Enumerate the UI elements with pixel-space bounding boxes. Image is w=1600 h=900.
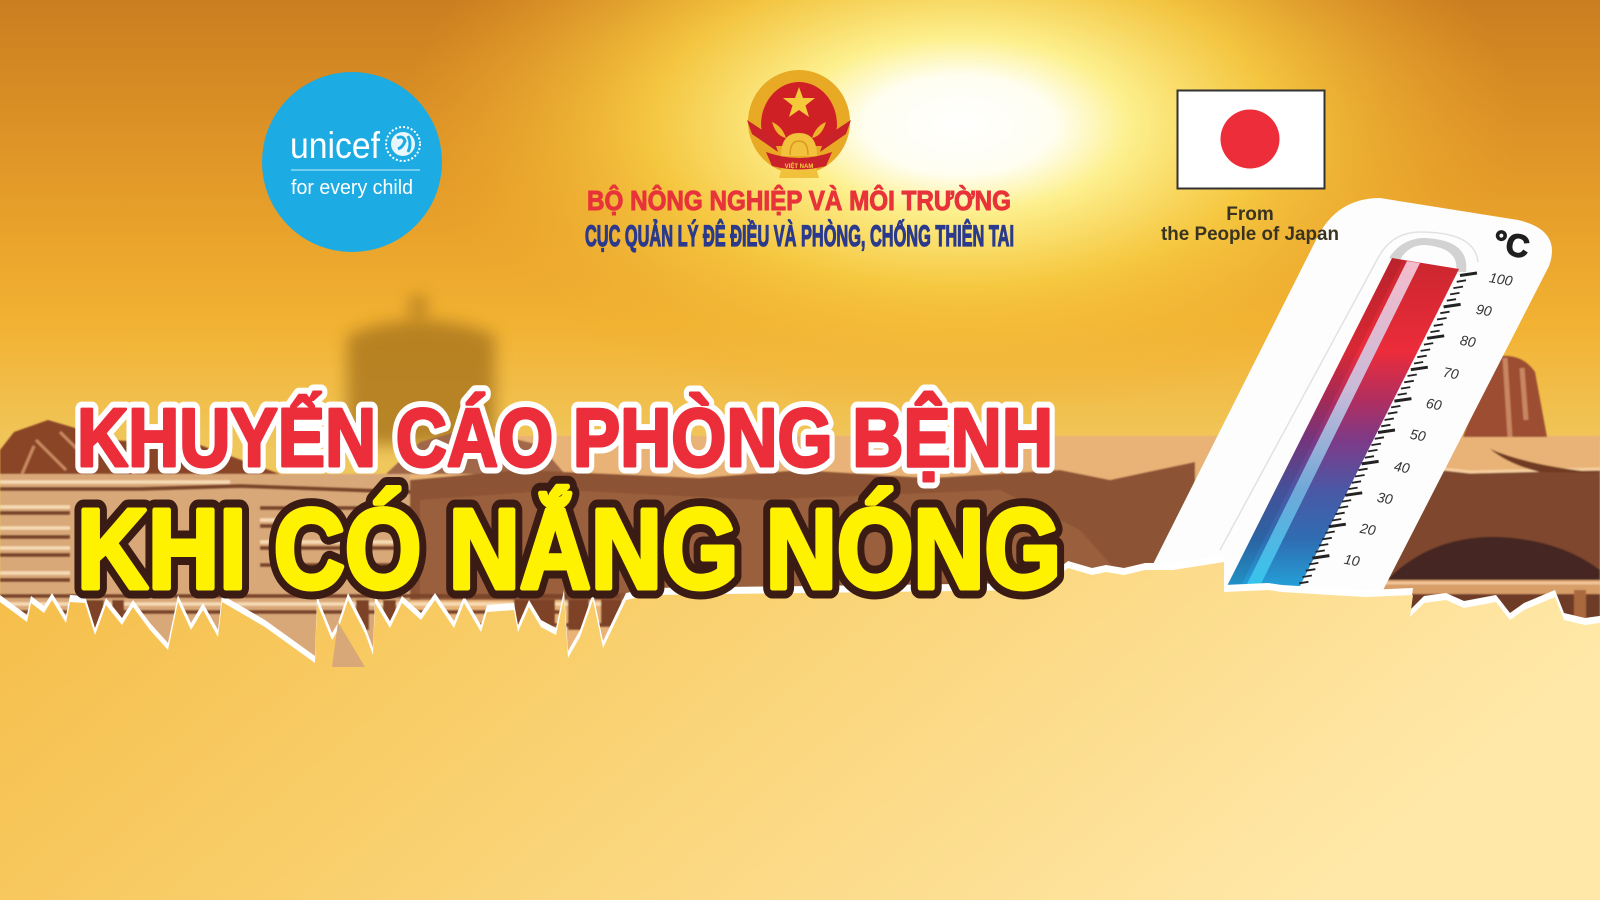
emblem ribbon [766,152,832,170]
logo: UNICEF for every child: for every child [291,177,413,199]
cracked plates on the left [0,474,410,672]
cliff cave shadow [1385,537,1600,590]
emblem red field [761,82,837,146]
logo: Vietnam national emblem [747,70,851,178]
scale labels: 40 [1393,458,1411,476]
right cliff [1340,465,1600,590]
emblem base [779,160,819,178]
emblem wheat [772,122,826,138]
right butte [1463,356,1547,437]
left butte [0,420,280,474]
scale labels: 80 [1459,332,1477,350]
scale labels: 90 [1475,301,1493,319]
cliff top edge [1390,463,1600,472]
scale labels: 30 [1376,489,1394,507]
central boulders [410,462,1195,600]
thermometer [1135,198,1552,600]
thermometer mercury column [1224,258,1459,592]
from the people of Japan [1161,204,1339,245]
unicef globe emblem [386,127,420,161]
mercury highlight [1243,261,1420,592]
emblem star [783,87,815,117]
scale ticks [1299,273,1477,583]
thermometer inner outline [1220,232,1478,550]
left shadow band [1224,258,1403,592]
logo: Japan flag [1178,90,1324,188]
scale labels: 50 [1409,426,1427,444]
scale labels [1343,269,1514,569]
mound behind first title [386,428,565,474]
right cracked plates [1380,580,1600,640]
ministry name: BỘ NÔNG NGHIỆP VÀ MÔI TRƯỜNG [587,184,1011,216]
title line 2: KHI CÓ NẮNG NÓNG [77,486,1061,612]
foreground cream area with torn edge [0,555,1600,900]
thermometer tube cap [1389,238,1466,272]
logo: UNICEF for every child: unicef [290,125,381,166]
scale labels: 20 [1358,520,1377,538]
from the people of Japan: From [1226,204,1274,225]
thermometer body [1135,198,1552,600]
emblem sashes [747,120,851,152]
title line 1: KHUYẾN CÁO PHÒNG BỆNH [77,391,1053,484]
scale labels: 10 [1343,551,1361,569]
from the people of Japan: the People of Japan [1161,224,1339,245]
logo: Vietnam national emblem: VIỆT NAM [785,162,813,170]
department name: CỤC QUẢN LÝ ĐÊ ĐIỀU VÀ PHÒNG, CHỐNG THIÊN TAI [585,219,1014,253]
scale labels: 60 [1425,395,1443,413]
desert landscape with cracked earth [0,356,1600,672]
logo: UNICEF for every child [262,72,442,252]
distant blurred tower silhouette [347,296,495,445]
degree celsius symbol: °C [1490,223,1533,266]
scale labels: 70 [1442,364,1460,382]
ground plain [0,436,1600,672]
emblem cogwheel [781,133,817,156]
tan wedge showing through tear [332,622,365,667]
scale labels: 100 [1488,269,1514,289]
